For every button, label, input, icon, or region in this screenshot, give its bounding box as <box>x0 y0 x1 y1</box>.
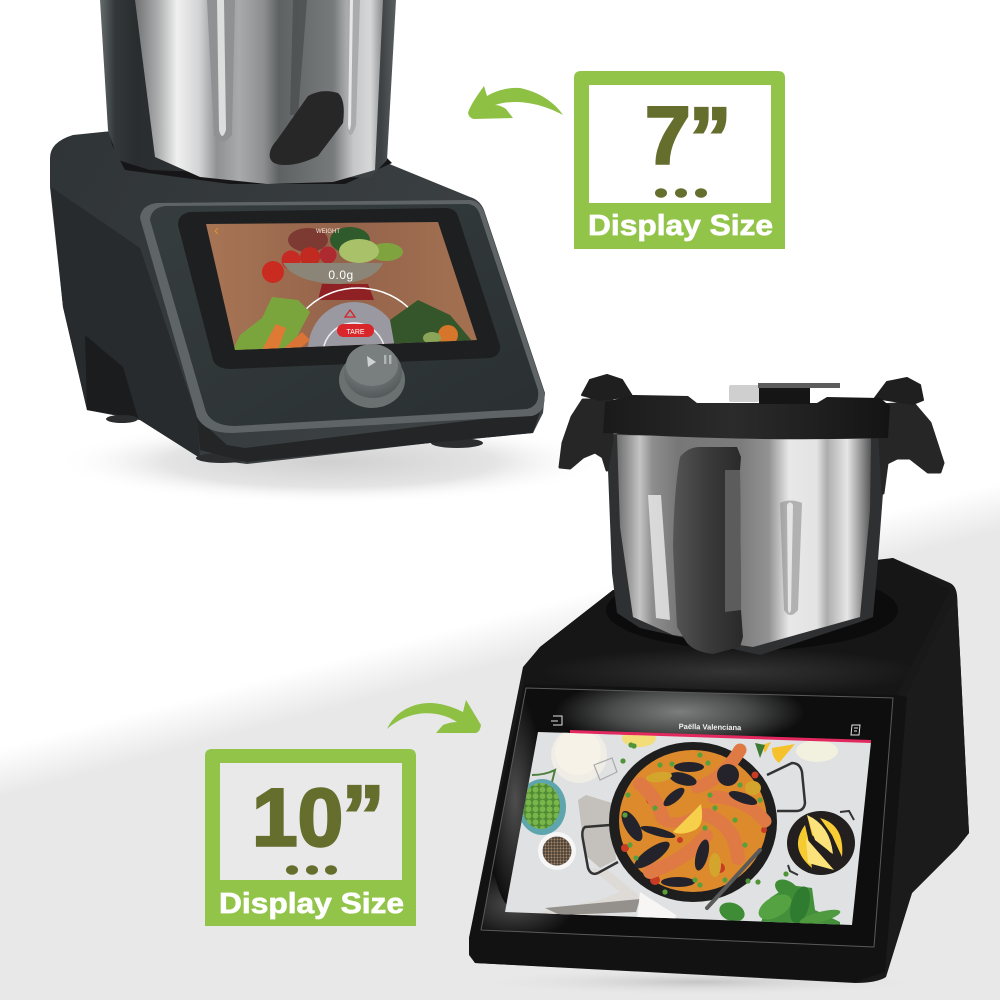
vegetables in scale bowl <box>262 227 403 300</box>
callout: 7 inch display <box>574 71 785 249</box>
loose peas <box>620 742 789 885</box>
display: weighing scale screen <box>206 222 477 350</box>
collar <box>110 135 392 184</box>
lid band <box>603 395 890 439</box>
display bezel <box>482 690 794 932</box>
icon: exit <box>551 716 562 725</box>
callout caption: Display Size <box>588 210 773 242</box>
tare button <box>337 324 374 337</box>
size value: 10 <box>252 772 343 864</box>
bowl grooves <box>648 495 802 620</box>
pan handles <box>767 763 805 811</box>
greens and carrots <box>233 297 310 350</box>
scale dial <box>308 302 400 347</box>
bowl collar <box>606 570 898 650</box>
right clip handle <box>880 403 943 493</box>
lemon wedge <box>673 804 702 834</box>
paella toppings <box>617 750 767 895</box>
base top surface <box>534 558 895 687</box>
lid knob <box>729 383 840 404</box>
callout caption: Display Size <box>219 888 404 920</box>
peas bowl <box>518 779 566 835</box>
pepper bowl <box>538 832 576 870</box>
ellipsis dots <box>286 865 337 875</box>
appliance: 7 inch model <box>50 0 545 464</box>
shrimp <box>640 750 765 872</box>
ellipsis dots <box>655 188 707 198</box>
left clip tab <box>582 375 632 400</box>
callout frame <box>574 71 785 249</box>
tare label: TARE <box>346 329 365 336</box>
size value: ” <box>689 91 732 186</box>
pot grooves <box>207 0 360 142</box>
base body <box>469 558 969 983</box>
base left side <box>51 187 200 458</box>
mussels <box>617 762 759 887</box>
weight heading: WEIGHT <box>316 229 340 235</box>
pot outer housing <box>100 0 396 178</box>
yellow oil dish <box>622 734 656 747</box>
spoon <box>707 850 760 908</box>
base right side notch shading <box>885 595 969 975</box>
appliance: 10 inch model <box>455 375 980 996</box>
steel bowl <box>617 435 871 647</box>
right clip tab <box>875 378 923 404</box>
recipe title: Paëlla Valenciana <box>679 722 742 732</box>
sprig <box>532 770 555 782</box>
basil <box>719 880 840 924</box>
lemon pan <box>787 811 855 875</box>
icon: recipe <box>851 725 860 735</box>
feet <box>106 415 483 463</box>
front face <box>469 684 907 982</box>
back arrow <box>215 228 218 234</box>
lemons top right <box>755 742 795 763</box>
rice jar <box>551 727 617 783</box>
towel <box>578 795 616 868</box>
callout frame <box>205 749 416 926</box>
bowl side housing <box>605 434 890 655</box>
display: paella screen <box>500 725 875 930</box>
rice red bits <box>621 756 767 885</box>
steel pot <box>135 0 383 184</box>
lower dark band <box>197 412 540 462</box>
weight reading: 0.0g <box>328 268 354 282</box>
paella pan <box>609 742 777 902</box>
handle <box>270 91 344 165</box>
arrow: to 10 inch display <box>387 700 481 733</box>
base body <box>50 131 545 464</box>
front panel <box>140 200 544 433</box>
callout: 10 inch display <box>205 749 416 926</box>
bowl handle <box>673 447 743 654</box>
display bezel <box>178 208 500 369</box>
size value: 7 <box>645 90 691 182</box>
knob <box>339 344 405 408</box>
pink progress bar <box>570 730 871 743</box>
wine dish <box>796 740 838 762</box>
arrow: to 7 inch display <box>468 86 563 119</box>
floor shadow <box>465 968 935 996</box>
left clip handle <box>560 400 612 470</box>
size value: ” <box>342 769 384 864</box>
peas on paella <box>622 752 763 895</box>
